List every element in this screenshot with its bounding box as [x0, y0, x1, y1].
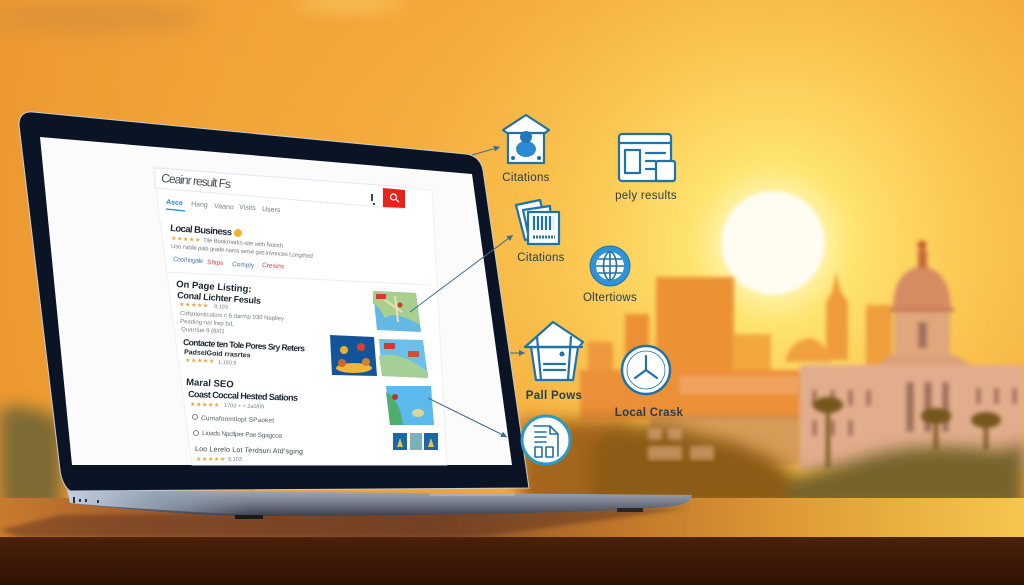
- local business listing: Comply: [232, 261, 255, 270]
- tabs: Asce: [166, 199, 183, 207]
- map thumbnail 2: [379, 339, 428, 378]
- sun: [707, 177, 839, 309]
- arrows: [410, 147, 525, 437]
- small thumbnails: [393, 433, 438, 450]
- local business listing: Coorl ingale: [173, 256, 204, 265]
- maral seo listing: Loo Lerelo Lot Terdsuri Atd'sging: [195, 446, 303, 456]
- tabs: Users: [262, 206, 281, 214]
- search bar: [155, 168, 405, 209]
- tabs: Vaano: [214, 203, 234, 211]
- label: pely results: pely results: [615, 190, 677, 202]
- maral seo listing: Cumafonmtlopt SPaoket: [201, 415, 274, 425]
- search bar: Ceainr result Fs: [161, 171, 232, 191]
- local business listing: Cresins: [262, 262, 285, 271]
- icon: citation cards: [516, 200, 559, 244]
- maral seo listing: Maral SEO: [186, 377, 234, 390]
- maral seo listing: ★★★★★: [196, 456, 226, 463]
- label: pall pows: Pall Pows: [526, 390, 582, 402]
- on page listing: Quarrlue 9 (6/01: [181, 327, 226, 335]
- maral seo listing: Coast Coccal Hested Sations: [188, 389, 298, 403]
- pale buildings among the trees: [648, 428, 714, 460]
- maral seo listing: 1703 + + 2a0/09: [224, 403, 264, 410]
- tabs: [166, 199, 281, 214]
- tabs: Hang: [191, 201, 208, 209]
- laptop base: [67, 490, 692, 519]
- wooden table: [0, 498, 1024, 585]
- local business listing: Tile Bookmarks-site with Notish: [203, 238, 283, 250]
- capitol: [800, 365, 1024, 470]
- map thumbnail 1: [373, 291, 421, 332]
- icon: globe: [590, 246, 630, 286]
- icon: browser results: [619, 134, 675, 181]
- icon: package box: [525, 322, 583, 380]
- red search button: [383, 188, 405, 208]
- icon: document circle: [522, 416, 570, 464]
- on page listing: Peading nai frep bd,: [180, 319, 234, 328]
- local business listing: Ships: [207, 259, 224, 267]
- contact listing: [183, 337, 306, 367]
- tabs: Visits: [239, 204, 256, 212]
- local business listing: [170, 223, 313, 271]
- local business listing: Local Business: [170, 223, 232, 238]
- on page listing: Conal Lichter Fesuls: [177, 290, 261, 306]
- label: citations 2: Citations: [517, 252, 565, 264]
- local business listing: Uso r'ablie pala grade nams serve gas invonces Longrhed: [171, 244, 313, 260]
- label: citations: Citations: [502, 172, 550, 184]
- on page listing: 9,103: [214, 304, 228, 311]
- on page listing: On Page Listing:: [176, 279, 252, 295]
- on page listing: ★★★★★: [179, 301, 209, 310]
- trees and foliage: [0, 406, 1024, 510]
- maral seo listing: ★★★★★: [190, 401, 220, 409]
- label: local crask: Local Crask: [615, 407, 684, 419]
- search results page: [153, 167, 447, 465]
- maral seo listing: 9.103: [228, 457, 242, 463]
- local business listing: ★★★★★: [171, 235, 201, 244]
- blurred city skyline with capitol building: [580, 240, 1024, 470]
- icon: clock: [622, 346, 670, 394]
- contact listing: PadselGoid rrasrtes: [184, 349, 251, 359]
- map thumbnail 3: [386, 386, 434, 425]
- maral seo listing: [186, 377, 303, 463]
- contact listing: ★★★★★: [185, 357, 215, 365]
- laptop: [19, 112, 692, 519]
- screen display: [40, 137, 512, 465]
- maral seo listing: Lioads Npctlper Pae Sgagcoa: [202, 430, 283, 440]
- laptop screen bezel: [19, 112, 529, 491]
- on page listing: Cldsmonticalors c 6 darrhp 930 Naplley: [180, 311, 284, 322]
- illustrated thumbnail: [330, 335, 377, 376]
- contact listing: 1,150.9: [218, 360, 236, 367]
- on page listing: [176, 279, 284, 335]
- icon: citations storefront: [503, 115, 549, 163]
- contact listing: Contacte ten Tole Pores Sry Reters: [183, 337, 306, 353]
- palm trees: [813, 397, 1001, 468]
- label: oltertiows: Oltertiows: [583, 292, 637, 304]
